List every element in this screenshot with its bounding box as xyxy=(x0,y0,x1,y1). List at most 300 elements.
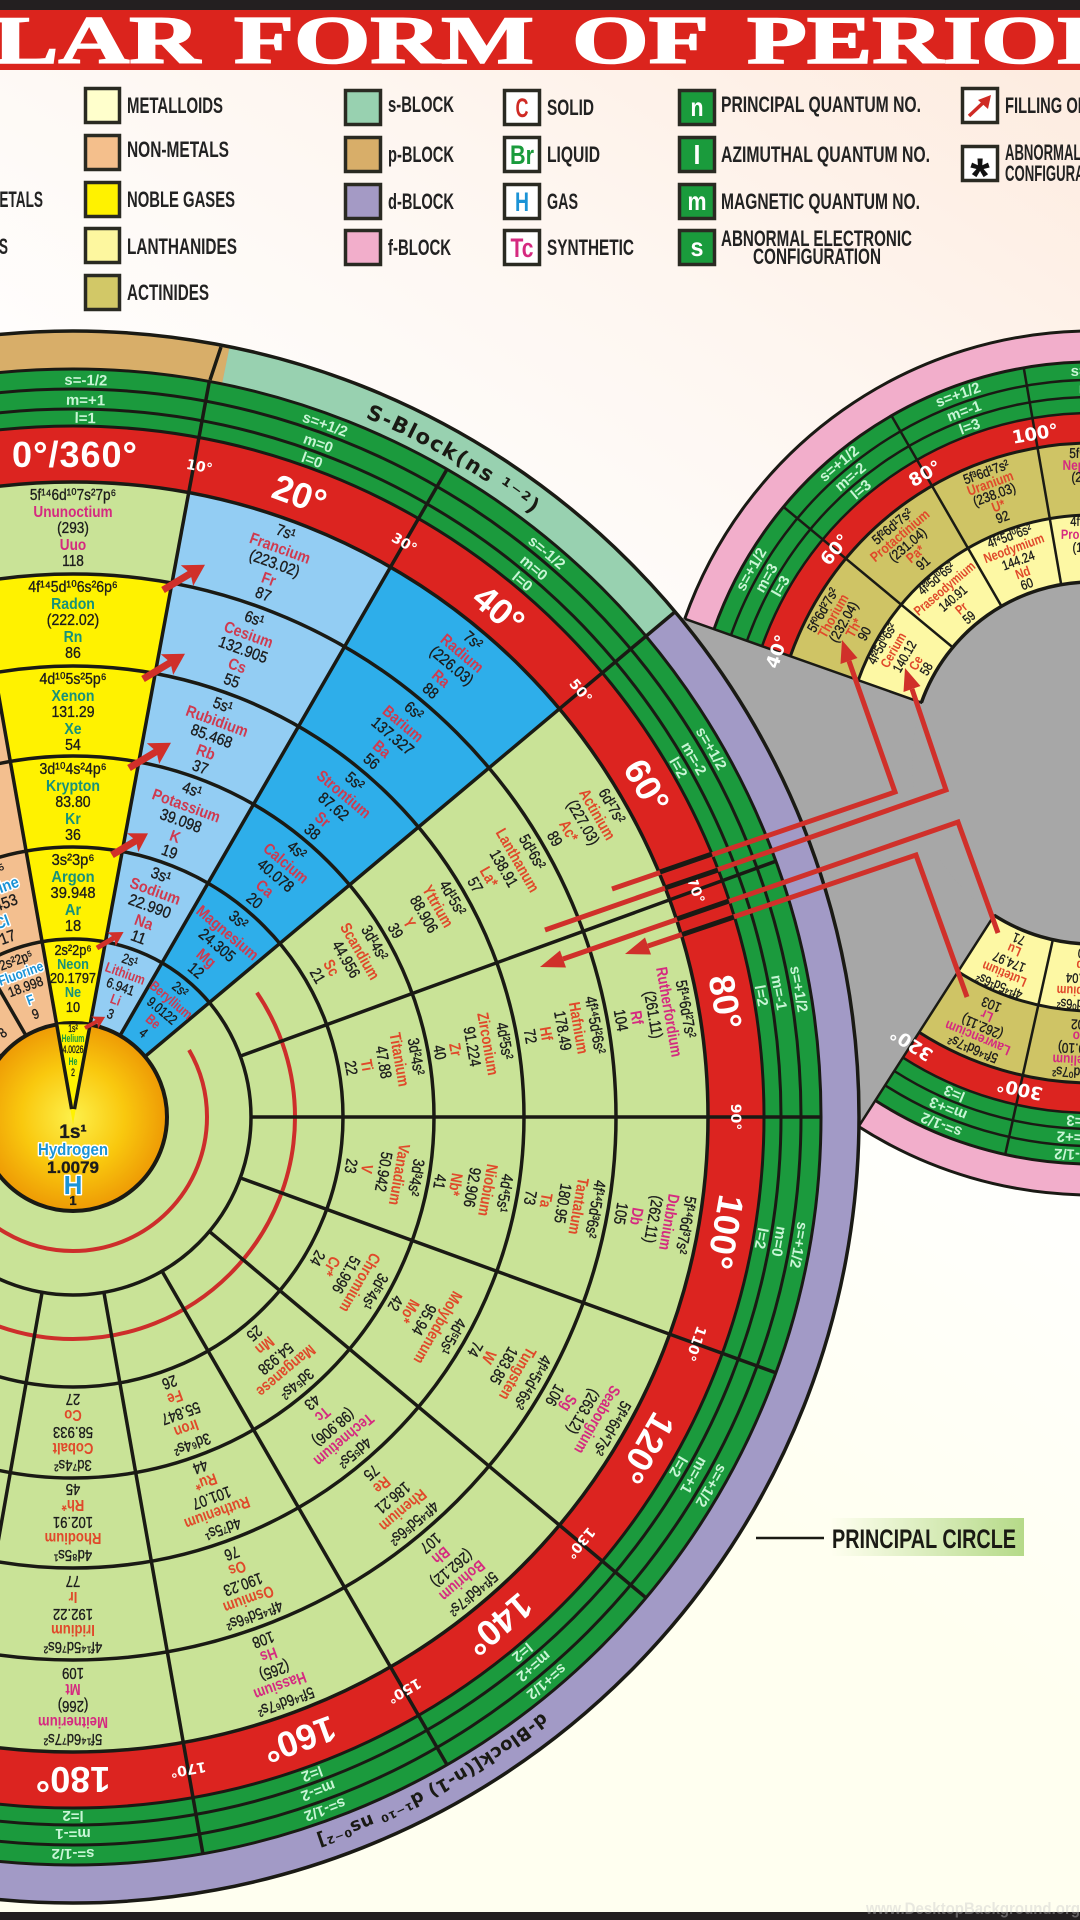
degree labels xyxy=(12,434,752,1800)
degree labels: 60° xyxy=(615,752,678,820)
legend: liquid: Br xyxy=(510,140,534,170)
degree labels: 120° xyxy=(610,1406,683,1491)
cell: Hafnium xyxy=(516,995,608,1067)
cell: Iron: 26 xyxy=(159,1371,179,1392)
cell: Radon: 86 xyxy=(65,644,81,662)
cell: Vanadium: Vanadium xyxy=(384,1142,412,1206)
cell: Tantalum: Tantalum xyxy=(564,1176,591,1236)
quantum numbers: l=0 xyxy=(508,569,536,595)
quantum numbers: l=2 xyxy=(62,1807,84,1824)
cell: Krypton xyxy=(40,760,106,844)
quantum numbers: s=-1/2 xyxy=(52,1845,94,1862)
cell: Xenon: Xenon xyxy=(51,687,95,705)
cell: Niobium: 92.906 xyxy=(459,1166,483,1208)
cell: Rubidium: 85.468 xyxy=(188,721,235,752)
legend: abnormal electronic configuration s: ABNORMAL ELECTRONIC xyxy=(721,226,912,251)
cell: Ununoctium: (293) xyxy=(57,520,89,537)
cell: Potassium: 39.098 xyxy=(157,805,204,837)
legend: actinides xyxy=(86,276,209,310)
cell: Tantalum: 73 xyxy=(519,1189,539,1206)
d-block title: d-Block[(n-1) d¹⁻¹⁰ ns⁰⁻²] xyxy=(316,1714,546,1848)
cell: Fluorine: 18.998 xyxy=(6,973,45,1000)
cell: Yttrium xyxy=(376,874,471,956)
legend: lanthanides xyxy=(86,228,237,262)
cell: Meitnerium: 5f¹⁴6d⁷7s² xyxy=(44,1730,102,1747)
cell: Rubidium xyxy=(167,686,256,787)
legend: non-metals: NON-METALS xyxy=(127,137,229,162)
cell: Technetium: Tc xyxy=(311,1402,333,1425)
quantum numbers: m=-1 xyxy=(767,974,790,1012)
cell: Magnesium: Magnesium xyxy=(192,902,262,965)
degree labels: 10° xyxy=(185,457,214,478)
cell: Protactinium: Protactinium xyxy=(867,506,933,565)
cell: Strontium: Strontium xyxy=(313,767,374,822)
helium wedge xyxy=(57,1024,90,1125)
cell: Hafnium: 72 xyxy=(519,1028,539,1045)
cell: Praseodymium: 59 xyxy=(960,608,979,627)
f-block degree labels: 300° xyxy=(995,1073,1045,1104)
cell: Lutetium: 174.97 xyxy=(991,948,1028,975)
cell: Manganese: Mn xyxy=(251,1332,277,1358)
cell: Neodymium: 60 xyxy=(1018,575,1035,593)
cell: Hafnium: Hf xyxy=(535,1025,555,1042)
f-block quantum numbers: l=3 xyxy=(957,415,983,439)
cell: Tungsten xyxy=(452,1319,554,1412)
degree labels: 150° xyxy=(384,1674,424,1706)
degree labels: 160° xyxy=(258,1708,342,1772)
cell: Hydrogen: 1s¹ xyxy=(59,1122,87,1143)
legend: azimuthal quantum number: AZIMUTHAL QUANTUM NO. xyxy=(721,142,930,167)
cell: Meitnerium xyxy=(38,1664,108,1747)
legend: abnormal configuration star: * xyxy=(970,148,990,204)
cell: Protactinium: 5f²6d¹7s² xyxy=(869,504,916,548)
degree labels: 140° xyxy=(457,1585,541,1664)
cell: Uranium: Uranium xyxy=(965,467,1016,499)
cell: Zirconium: 4d²5s² xyxy=(492,1021,516,1061)
cell: Hassium: 5f¹⁴6d⁶7s² xyxy=(255,1683,316,1719)
cell: Barium: 137.327 xyxy=(367,713,417,759)
cell: Rubidium: Rubidium xyxy=(183,702,250,741)
cell: Strontium: 87.62 xyxy=(314,789,352,825)
legend: azimuthal quantum number: l xyxy=(693,140,701,170)
cell: Uranium: U* xyxy=(989,496,1008,516)
legend: noble gases: NOBLE GASES xyxy=(127,187,235,212)
cell: Helium: 2 xyxy=(71,1066,75,1078)
f-block quantum numbers: m=3 xyxy=(752,561,782,596)
cell: Lawrencium xyxy=(938,984,1027,1070)
cell: Francium xyxy=(230,513,319,614)
cell: Xenon: Xe xyxy=(64,720,82,738)
cell: Fluorine: F xyxy=(24,991,37,1009)
f-block quantum numbers: m=-2 xyxy=(832,459,870,495)
cell: Osmium: Osmium xyxy=(221,1581,276,1616)
cell: Hydrogen: Hydrogen xyxy=(38,1140,108,1159)
cell: Iron: Fe xyxy=(165,1386,185,1407)
cell: Rhenium xyxy=(342,1446,442,1548)
legend: principal quantum number xyxy=(680,90,921,124)
cell: Fluorine: 9 xyxy=(30,1005,41,1023)
cell: Lithium xyxy=(88,945,152,1029)
legend: liquid xyxy=(504,138,600,172)
cell: Lawrencium: 103 xyxy=(979,993,1004,1016)
degree labels: 100° xyxy=(699,1192,752,1272)
cell: Uranium: 92 xyxy=(993,507,1011,527)
legend: principal quantum number: n xyxy=(690,92,704,122)
legend: abnormal electronic configuration s: s xyxy=(690,232,704,262)
cell: Zirconium: 40 xyxy=(429,1044,449,1061)
cell: Ruthenium: Ru* xyxy=(192,1469,219,1493)
cell: Rubidium: 5s¹ xyxy=(210,694,235,717)
cell: Cobalt: 3d⁷4s² xyxy=(54,1456,92,1473)
cell: Dubnium: (262.11) xyxy=(640,1194,665,1244)
cell: Rhodium: 4d⁸5s¹ xyxy=(54,1546,92,1563)
cell: Magnesium: 24.305 xyxy=(195,925,239,966)
cell: Dubnium xyxy=(606,1183,699,1255)
legend: synthetic: Tc xyxy=(510,233,534,263)
legend: solid: C xyxy=(516,93,528,123)
legend: azimuthal quantum number xyxy=(680,138,930,172)
cell: Tungsten: 4f¹⁴5d⁴6s² xyxy=(509,1352,554,1412)
cell: Meitnerium: Meitnerium xyxy=(38,1713,108,1730)
cell: Bohrium: (262.12) xyxy=(427,1545,476,1590)
cell: Rutherfordium: 104 xyxy=(609,1008,630,1033)
cell: Hassium xyxy=(232,1621,316,1719)
legend: noble gases xyxy=(86,182,235,216)
bottom bar with watermark xyxy=(0,1899,1080,1920)
cell: Vanadium: V xyxy=(356,1163,375,1175)
cell: Praseodymium: Praseodymium xyxy=(911,558,978,619)
quantum numbers xyxy=(52,372,811,1862)
f-block quantum numbers: l=3 xyxy=(942,1081,968,1105)
cell: Iridium: Iridium xyxy=(51,1621,95,1638)
legend: d-block xyxy=(346,184,454,218)
cell: Neodymium: 4f⁴5d⁰6s² xyxy=(985,521,1034,551)
cell: Niobium: Niobium xyxy=(474,1163,500,1217)
cell: Osmium: 190.23 xyxy=(221,1568,265,1599)
cell: Thorium: (232.04) xyxy=(825,599,861,645)
cell: Chromium: Cr* xyxy=(318,1253,343,1279)
cell: Rhenium: 186.21 xyxy=(371,1478,413,1517)
arrow: to cerium xyxy=(545,668,946,930)
cell: Osmium: Os xyxy=(226,1556,248,1579)
cell: Vanadium: 23 xyxy=(340,1157,360,1175)
cell: Molybdenum xyxy=(367,1263,480,1375)
legend: filling order arrow xyxy=(962,88,1080,122)
quantum numbers: m=-2 xyxy=(677,739,710,778)
cell: Francium: (223.02) xyxy=(247,546,302,581)
quantum numbers: l=2 xyxy=(751,984,771,1008)
cell: Titanium: Ti xyxy=(356,1058,375,1073)
cell: Fluorine xyxy=(0,945,60,1029)
cell: Oxygen xyxy=(0,969,24,1053)
cell: Technetium: 4d⁵5s² xyxy=(334,1433,374,1471)
legend: s-block: s-BLOCK xyxy=(388,92,454,117)
cell: Tungsten: W xyxy=(477,1347,499,1367)
cell: Cerium: Cerium xyxy=(877,630,910,671)
cell: Ununoctium: 118 xyxy=(62,553,84,570)
cell: Helium: Helium xyxy=(62,1032,84,1044)
arrow: krypton to rubidium xyxy=(123,732,177,778)
cell: Molybdenum: Mo* xyxy=(395,1296,422,1326)
f-block quantum numbers: m=-1 xyxy=(945,398,984,426)
cell: Iridium: 192.22 xyxy=(53,1605,93,1622)
cell: Francium: 87 xyxy=(253,584,274,606)
cell: Hydrogen: 1 xyxy=(69,1193,77,1208)
cell: Magnesium: 3s² xyxy=(225,907,251,933)
cell: Rutherfordium: Rf xyxy=(626,1009,646,1026)
main wheel colored rings xyxy=(0,350,840,1884)
cell: Ununoctium: Ununoctium xyxy=(33,504,113,521)
cell: Radium: 7s² xyxy=(460,628,486,654)
cell: Dubnium: Db xyxy=(626,1206,646,1226)
cell: Yttrium: Y xyxy=(399,915,418,932)
cell: Titanium xyxy=(337,1028,428,1096)
cell: Hafnium: 4f¹⁴5d²6s² xyxy=(581,995,608,1055)
main wheel radial dividers xyxy=(0,347,821,1854)
quantum numbers: m=-2 xyxy=(299,1776,338,1804)
cell: Xenon: 4d¹⁰5s²5p⁶ xyxy=(40,670,106,688)
cell: Rhenium: Re xyxy=(369,1472,393,1496)
cell: Potassium: K xyxy=(167,827,183,847)
legend: magnetic quantum number xyxy=(680,184,920,218)
cell: Helium: He xyxy=(69,1055,77,1067)
cell: Helium: 4.0026 xyxy=(63,1043,83,1055)
cell: Krypton: 83.80 xyxy=(55,793,91,811)
cell: Calcium: 40.078 xyxy=(253,855,297,896)
cell: Dubnium: 105 xyxy=(609,1201,630,1226)
cell: Beryllium: 2s² xyxy=(169,979,191,1000)
cell: Seaborgium xyxy=(527,1357,638,1465)
cell: Uranium: (238.03) xyxy=(971,479,1018,510)
cell: Lithium: Li xyxy=(108,990,123,1009)
cell: Vanadium: 3d³4s² xyxy=(403,1157,427,1197)
block titles xyxy=(316,405,546,1848)
arrow: lawrencium to actinides row xyxy=(625,855,967,997)
quantum numbers: l=2 xyxy=(665,754,691,781)
cell: Hassium: 108 xyxy=(250,1627,276,1651)
legend: abnormal configuration star xyxy=(962,140,1080,204)
legend: magnetic quantum number: m xyxy=(688,186,706,216)
legend: solid: SOLID xyxy=(547,95,594,120)
cell: Rhenium: 4f¹⁴5d⁵6s² xyxy=(385,1497,442,1548)
cell: Argon: 18 xyxy=(65,917,81,935)
cell: Rhodium xyxy=(45,1480,101,1563)
title banner: PERIODIC xyxy=(747,2,1080,78)
cell: Cesium xyxy=(205,602,281,698)
cell: Uranium: 5f³6d¹7s² xyxy=(961,456,1012,488)
element cells xyxy=(0,487,701,1747)
legend: principal quantum number: PRINCIPAL QUANTUM NO. xyxy=(721,92,921,117)
cell: Molybdenum: 4d⁵5s¹ xyxy=(435,1315,469,1357)
cell: Rhodium: 102.91 xyxy=(53,1513,93,1530)
cell: Cerium: 4f²5d⁰6s² xyxy=(864,620,900,667)
cell: Strontium: Sr xyxy=(311,808,334,832)
cell: Praseodymium: Pr xyxy=(952,599,971,618)
cell: Hydrogen xyxy=(38,1122,108,1208)
cell: Beryllium: Beryllium xyxy=(146,978,195,1023)
title banner xyxy=(0,2,1080,78)
cell: Argon: 39.948 xyxy=(51,884,95,902)
cell: Yttrium: 4d¹5s² xyxy=(435,878,469,919)
f-block degree labels: 320° xyxy=(887,1022,937,1065)
cell: Ruthenium: 101.07 xyxy=(189,1482,233,1512)
cell: Lutetium xyxy=(974,922,1044,1002)
cell: Dubnium: 5f¹⁴6d³7s² xyxy=(671,1195,699,1255)
quantum numbers: s=+1/2 xyxy=(523,1660,570,1703)
cell: Niobium: Nb* xyxy=(444,1172,465,1197)
cell: Bohrium: 107 xyxy=(416,1529,444,1556)
degree labels: 40° xyxy=(465,576,533,643)
cell: Lawrencium: Lr xyxy=(978,1006,995,1026)
cell: Technetium: Technetium xyxy=(310,1409,377,1469)
legend: p-block: p-BLOCK xyxy=(388,142,454,167)
f-block degree labels xyxy=(762,420,1060,1104)
cell: Molybdenum: 95.94 xyxy=(407,1301,439,1338)
cell: Radium: Ra xyxy=(428,666,454,692)
cell: Hassium: Hassium xyxy=(251,1667,308,1702)
cell: Hafnium: Hafnium xyxy=(564,1001,591,1055)
cell: Lithium: 3 xyxy=(105,1005,116,1023)
arrow: to thorium xyxy=(612,640,895,889)
cell: Cerium xyxy=(864,620,944,692)
arrow crossings over the red ring xyxy=(660,854,734,935)
cell: Argon: 3s²3p⁶ xyxy=(52,851,94,869)
cell: Zirconium: 91.224 xyxy=(459,1026,483,1068)
cell: Tungsten: 183.85 xyxy=(485,1343,520,1387)
cell: Scandium: 21 xyxy=(305,966,328,987)
cell: Radium: (226.03) xyxy=(426,642,477,689)
cell: Iridium: 4f¹⁴5d⁷6s² xyxy=(44,1638,102,1655)
cell: Krypton: Krypton xyxy=(46,777,100,795)
cell: Calcium: 4s² xyxy=(283,837,310,864)
quantum numbers: m=0 xyxy=(768,1225,790,1258)
cell: Bohrium: Bh xyxy=(428,1542,453,1567)
cell: Radon: Radon xyxy=(51,595,95,613)
cell: Magnesium: 12 xyxy=(184,959,207,983)
cell: Osmium: 4f¹⁴5d⁶6s² xyxy=(223,1596,285,1633)
cell: Lawrencium: 5f¹⁴6d¹7s² xyxy=(945,1031,1000,1067)
cell: Rutherfordium: Rutherfordium xyxy=(652,966,685,1058)
cell: Lithium: 6.941 xyxy=(104,974,137,999)
legend: f-block xyxy=(346,230,451,264)
legend: f-block: f-BLOCK xyxy=(388,235,451,260)
f-block quantum numbers: l=3 xyxy=(769,573,794,600)
legend: clipped metals labels xyxy=(0,187,43,259)
cell: Hydrogen: 1.0079 xyxy=(47,1158,99,1177)
cell: Lutetium: Lutetium xyxy=(980,958,1029,990)
quantum numbers: s=+1/2 xyxy=(692,724,730,773)
cell: Scandium: 3d¹4s² xyxy=(357,923,391,964)
cell: Seaborgium: 106 xyxy=(541,1381,567,1409)
cell: Francium: Francium xyxy=(247,529,313,568)
cell: Beryllium: 4 xyxy=(136,1025,151,1041)
cell: Hydrogen: H xyxy=(64,1170,82,1200)
cell: Yttrium: 88.906 xyxy=(406,893,441,937)
cell: Hassium: (265) xyxy=(257,1656,292,1683)
legend: actinides: ACTINIDES xyxy=(127,280,209,305)
cell: Actinium: 6d¹7s² xyxy=(594,786,628,827)
cell: Chromium: 51.996 xyxy=(328,1252,363,1296)
degree labels: 0°/360° xyxy=(12,434,138,475)
quantum numbers: m=+2 xyxy=(513,1647,554,1685)
cell: Cobalt: Cobalt xyxy=(52,1439,93,1456)
callout: principal circle xyxy=(756,1518,1024,1556)
cell: Krypton: Kr xyxy=(65,810,81,828)
cell: Potassium: 19 xyxy=(159,841,180,863)
cell: Scandium: 44.956 xyxy=(328,938,363,982)
f-block transfer arrows xyxy=(540,640,998,997)
cell: Osmium: 76 xyxy=(222,1542,241,1563)
cell: Technetium: (98.906) xyxy=(309,1404,357,1449)
cell: Manganese xyxy=(221,1303,329,1413)
degree labels: 20° xyxy=(267,466,332,523)
cell: Iridium: Ir xyxy=(68,1588,77,1605)
cell: Rutherfordium: 5f¹⁴6d²7s² xyxy=(671,979,699,1039)
cell: Meitnerium: (266) xyxy=(58,1697,88,1714)
quantum numbers: s=-1/2 xyxy=(64,372,107,389)
cell: Potassium xyxy=(133,770,228,873)
cell: Lanthanum: 5d¹6s² xyxy=(515,832,548,873)
cell: Molybdenum: Molybdenum xyxy=(409,1288,465,1367)
cell: Meitnerium: Mt xyxy=(65,1680,81,1697)
cell: Ununoctium xyxy=(30,487,116,570)
arrow: argon to potassium xyxy=(106,824,154,864)
cell: Iron: Iron xyxy=(171,1415,201,1440)
f-block degree labels: 100° xyxy=(1010,420,1060,449)
cell: Beryllium: Be xyxy=(143,1011,163,1032)
legend: p-block xyxy=(346,138,454,172)
legend: non-metals xyxy=(86,136,229,170)
callout: principal circle: PRINCIPAL CIRCLE xyxy=(832,1524,1016,1554)
quantum numbers: l=2 xyxy=(665,1453,691,1480)
cell: Bohrium xyxy=(402,1517,501,1619)
cell: Cerium: 140.12 xyxy=(890,638,920,675)
cell: Rhenium: 75 xyxy=(360,1461,382,1483)
cell: Radium: Radium xyxy=(437,630,487,677)
cell: Osmium xyxy=(201,1534,285,1633)
cell: Calcium: 20 xyxy=(242,889,266,913)
cell: Tantalum: Ta xyxy=(535,1192,555,1210)
cell: Rhenium: Rhenium xyxy=(375,1485,429,1534)
cell: Strontium: 38 xyxy=(300,820,324,844)
cell: Cobalt: Co xyxy=(64,1406,82,1423)
cell: Francium: 7s¹ xyxy=(273,521,298,545)
cell: Technetium xyxy=(278,1371,388,1482)
cell: Iron: 3d⁶4s² xyxy=(171,1429,213,1458)
cell: Lawrencium: (262.11) xyxy=(959,1011,1005,1043)
cell: Lanthanum xyxy=(449,817,557,920)
degree labels: 180° xyxy=(36,1759,110,1800)
cell: Calcium: Ca xyxy=(252,876,278,902)
f-block radial dividers xyxy=(685,368,1080,1154)
cell: Protactinium xyxy=(859,497,956,593)
cell: Neodymium: Neodymium xyxy=(982,530,1046,566)
cell: Titanium: 3d²4s² xyxy=(403,1037,427,1077)
arrow: radon to francium xyxy=(157,554,211,600)
hydrogen sun xyxy=(0,1023,167,1211)
cell: Vanadium: 50.942 xyxy=(370,1150,395,1193)
cell: Bohrium: 5f¹⁴6d⁵7s² xyxy=(444,1567,501,1619)
cell: Promethium xyxy=(1061,514,1080,580)
cell: Lutetium: Lu xyxy=(1005,940,1023,959)
f-block inner grey disc xyxy=(911,582,1080,944)
cell: Bohrium: Bohrium xyxy=(435,1556,488,1604)
cell: Protactinium: 91 xyxy=(913,553,933,573)
cell: Titanium: Titanium xyxy=(385,1031,412,1088)
f-block quantum numbers: l=3 xyxy=(848,477,875,503)
legend: liquid: LIQUID xyxy=(547,142,600,167)
title banner: OF xyxy=(572,2,709,78)
